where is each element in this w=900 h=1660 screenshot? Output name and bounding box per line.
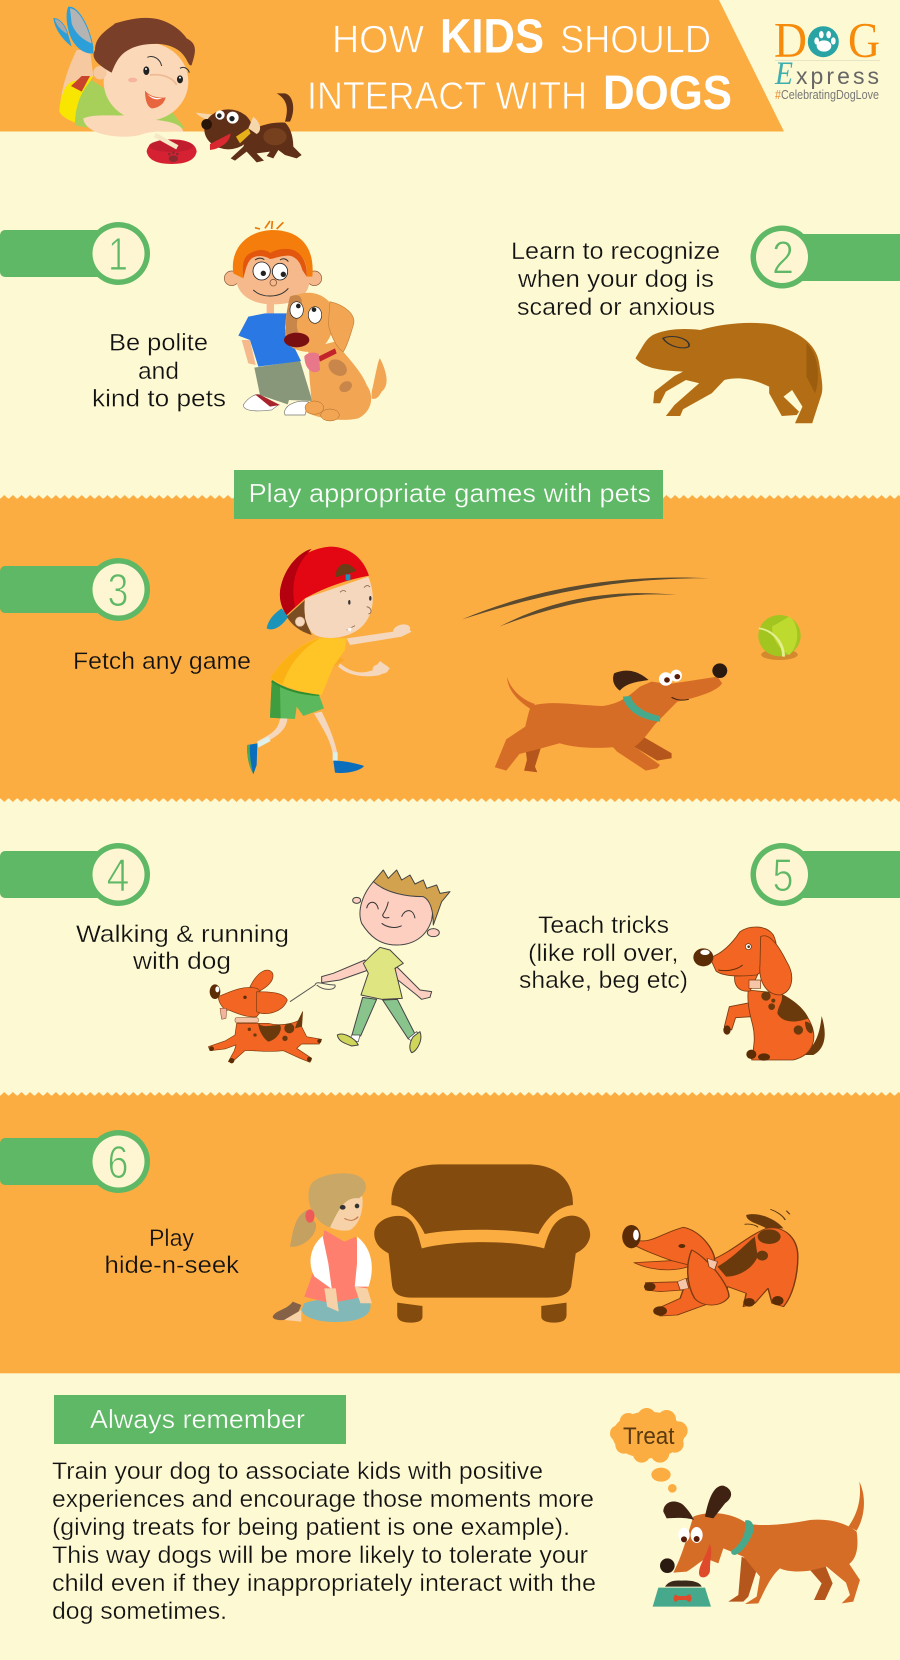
badge 3 (0, 558, 150, 621)
text: fetch: Fetch any game (73, 648, 251, 675)
text: hide and seek: hide-n-seek (104, 1252, 240, 1279)
text: recognize (511, 238, 720, 321)
text: teach tricks (519, 912, 688, 994)
badge 4: 4 (106, 849, 130, 901)
illustration: running dog (495, 663, 727, 772)
badge 6 (0, 1130, 150, 1193)
text: be polite: Be polite (109, 330, 208, 357)
logo: Dog Express: G (848, 12, 880, 68)
text block: training advice: This way dogs will be more likely to tolerate your (52, 1542, 588, 1569)
badge 1: 1 (108, 228, 128, 280)
text: be polite (92, 330, 226, 413)
illustration: thought bubble with treat: Treat (623, 1423, 675, 1450)
text: walking and running: with dog (132, 948, 231, 975)
step 4 (0, 843, 450, 1063)
text: teach tricks: (like roll over, (528, 940, 678, 967)
title (307, 11, 732, 120)
logo: Dog Express: #CelebratingDogLove (775, 88, 879, 102)
step 5 (519, 843, 900, 1061)
title: SHOULD (560, 19, 711, 62)
panel: orange band behind game 6 (0, 1092, 900, 1373)
panel: orange band behind games 3 (0, 495, 900, 802)
badge 1 (0, 222, 150, 285)
illustration: ball motion streaks (462, 577, 712, 627)
text block: training advice (52, 1458, 596, 1625)
text: recognize: Learn to recognize (511, 238, 720, 265)
illustration: boy hugging dog (224, 221, 387, 421)
badge 6: 6 (108, 1136, 128, 1188)
text block: training advice: Train your dog to associate kids with positive (52, 1458, 543, 1485)
text: walking and running: Walking & running (76, 921, 289, 948)
text block: training advice: experiences and encourage those moments more (52, 1486, 594, 1513)
title: HOW (332, 19, 424, 62)
text: hide and seek: Play (149, 1225, 195, 1252)
text: hide and seek (104, 1225, 240, 1279)
illustration: kneeling girl (273, 1173, 372, 1322)
text block: training advice: (giving treats for being patient is one example). (52, 1514, 570, 1541)
text block: training advice: dog sometimes. (52, 1598, 227, 1625)
illustration: boy walking dog on leash (208, 870, 450, 1063)
illustration: playful bowing dog (622, 1209, 798, 1316)
text: be polite: kind to pets (92, 386, 226, 413)
step 2 (511, 226, 900, 423)
step 1 (0, 221, 387, 421)
text: teach tricks: shake, beg etc) (519, 967, 688, 994)
text: recognize: scared or anxious (517, 294, 715, 321)
illustration: boy lying down with puppy and bowl (53, 7, 302, 164)
illustration: dog eating from bowl (653, 1482, 864, 1607)
badge 2 (750, 226, 900, 288)
logo: Dog Express: E (774, 56, 793, 92)
illustration: tennis ball (758, 615, 801, 660)
heading banner: play appropriate games (234, 470, 663, 519)
illustration: scared dog (635, 323, 822, 423)
logo: Dog Express (774, 12, 880, 102)
illustration: dog raising paw (693, 927, 825, 1061)
step 6 (0, 1130, 798, 1323)
step 3 (0, 547, 801, 774)
title: INTERACT WITH (307, 75, 587, 118)
text block: training advice: child even if they inappropriately interact with the (52, 1570, 596, 1597)
icon: armchair (374, 1164, 590, 1323)
illustration: thought bubble with treat (610, 1408, 688, 1493)
text: teach tricks: Teach tricks (538, 912, 669, 939)
heading banner: always remember: Always remember (90, 1404, 305, 1434)
badge 5 (750, 843, 900, 906)
text: walking and running (76, 921, 289, 975)
text: recognize: when your dog is (517, 266, 714, 293)
title: DOGS (603, 67, 732, 120)
badge 2: 2 (772, 232, 794, 284)
badge 4 (0, 843, 150, 906)
illustration: boy throwing ball (247, 547, 412, 774)
heading banner: play appropriate games: Play appropriate games with pets (248, 478, 651, 508)
header banner (0, 0, 784, 132)
text: be polite: and (138, 358, 179, 385)
logo: Dog Express: xpress (796, 63, 879, 89)
logo: Dog Express: D (774, 12, 807, 68)
title: KIDS (440, 11, 544, 64)
badge 3: 3 (108, 564, 128, 616)
badge 5: 5 (772, 849, 794, 901)
heading banner: always remember (54, 1395, 346, 1444)
